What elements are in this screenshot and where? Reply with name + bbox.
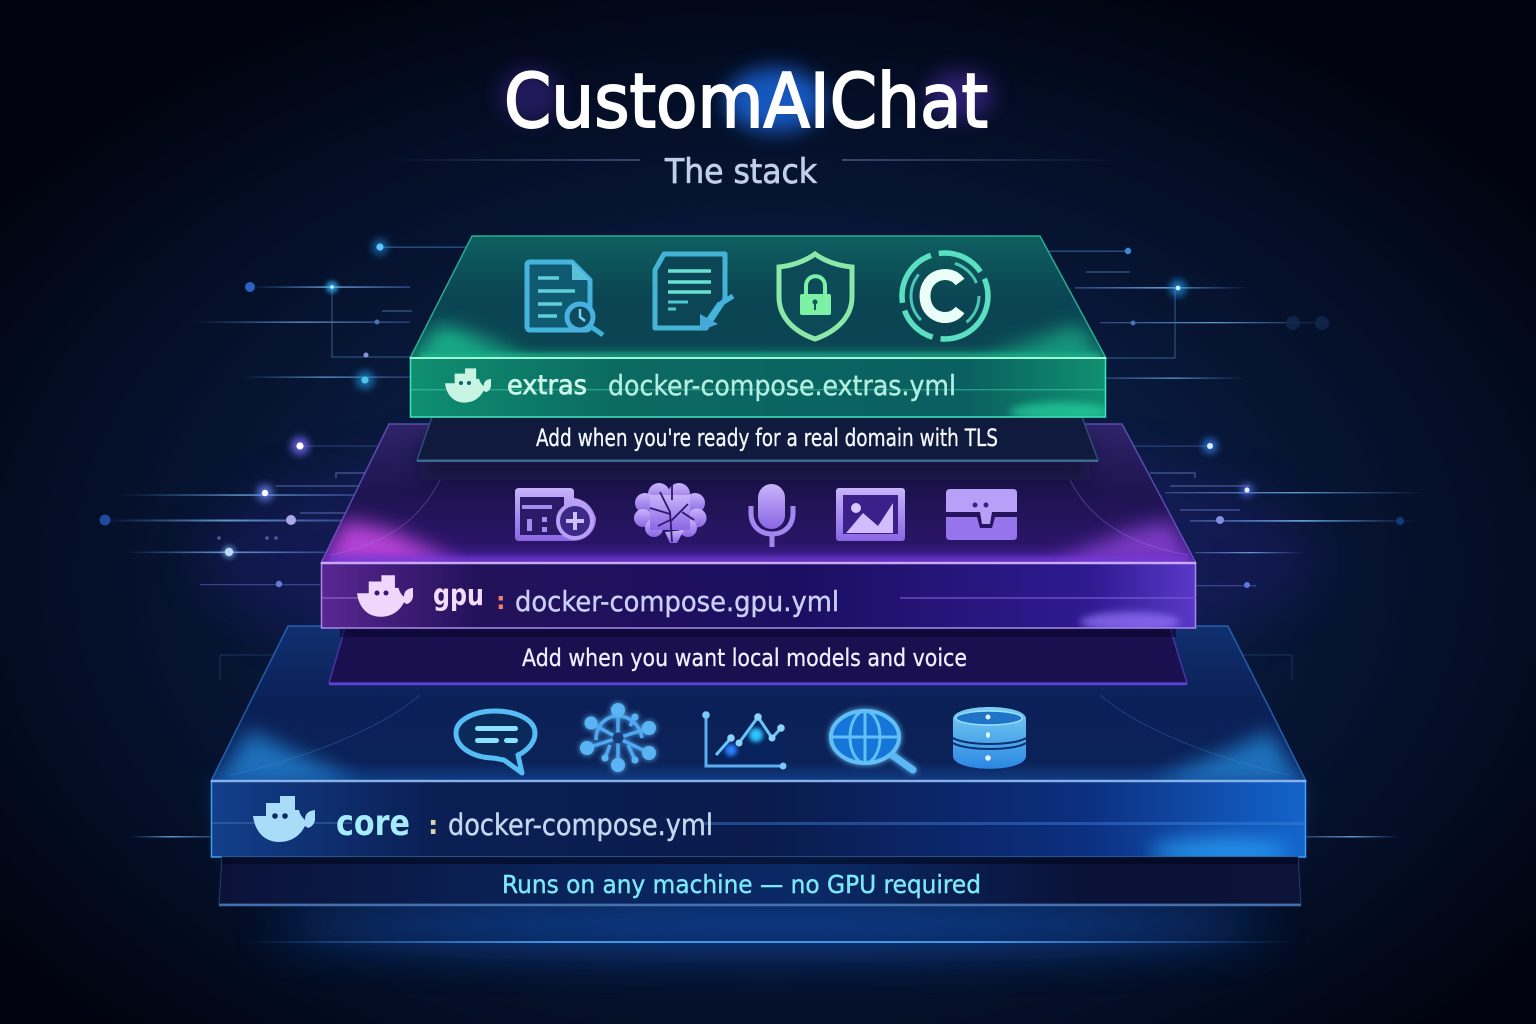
core description: Runs on any machine — no GPU required <box>502 870 981 899</box>
icon: circular C <box>902 253 988 339</box>
extras icons <box>527 253 988 339</box>
icon: microphone <box>751 484 793 547</box>
title: CustomAIChat <box>504 57 988 145</box>
core top face <box>211 626 1306 781</box>
icon: network hub <box>580 703 656 772</box>
icon: shield lock <box>779 254 852 339</box>
extras description plate <box>417 417 1098 461</box>
icon: line chart <box>702 711 786 770</box>
gpu front face <box>322 563 1196 628</box>
compose file gpu: docker-compose.gpu.yml <box>515 585 839 618</box>
circuit lines right <box>1045 250 1425 586</box>
gpu description plate <box>329 628 1187 684</box>
core front face <box>212 781 1306 857</box>
icon: chat bubble <box>456 711 535 773</box>
layer: gpu <box>321 424 1196 632</box>
subtitle: The stack <box>664 152 817 192</box>
extras description: Add when you're ready for a real domain with TLS <box>536 424 998 452</box>
icon: picture <box>836 488 905 541</box>
gpu top face <box>321 424 1196 563</box>
layer: extras <box>410 236 1110 422</box>
core description plate <box>219 857 1301 905</box>
icon: docker whale gpu <box>357 575 413 617</box>
icon: dashboard add <box>515 488 596 541</box>
extras top face <box>410 236 1106 358</box>
compose file core: docker-compose.yml <box>448 808 713 842</box>
icon: document edit <box>655 254 733 331</box>
icon: docker whale core <box>253 796 315 842</box>
circuit nodes right <box>1125 248 1404 588</box>
icon: docker whale extras <box>445 368 491 403</box>
gpu description: Add when you want local models and voice <box>522 644 967 672</box>
core glow <box>211 781 1306 860</box>
label: extras: extras <box>507 370 587 401</box>
circuit nodes left <box>100 239 388 587</box>
layer: core <box>211 626 1306 866</box>
circuit lines left <box>105 246 470 585</box>
title <box>380 57 1122 161</box>
icon: globe search <box>831 711 913 770</box>
extras front face <box>410 358 1106 417</box>
separator colon: : <box>428 811 438 841</box>
label: gpu: gpu <box>433 578 484 612</box>
compose file extras: docker-compose.extras.yml <box>608 369 956 402</box>
icon: brain <box>634 483 706 543</box>
label: core: core <box>336 803 410 844</box>
icon: document search <box>527 262 603 335</box>
icon: database <box>953 707 1026 769</box>
icon: chat toolbox <box>946 489 1017 540</box>
separator colon: : <box>496 587 506 615</box>
gpu icons <box>515 483 1017 547</box>
core icons <box>456 703 1026 773</box>
